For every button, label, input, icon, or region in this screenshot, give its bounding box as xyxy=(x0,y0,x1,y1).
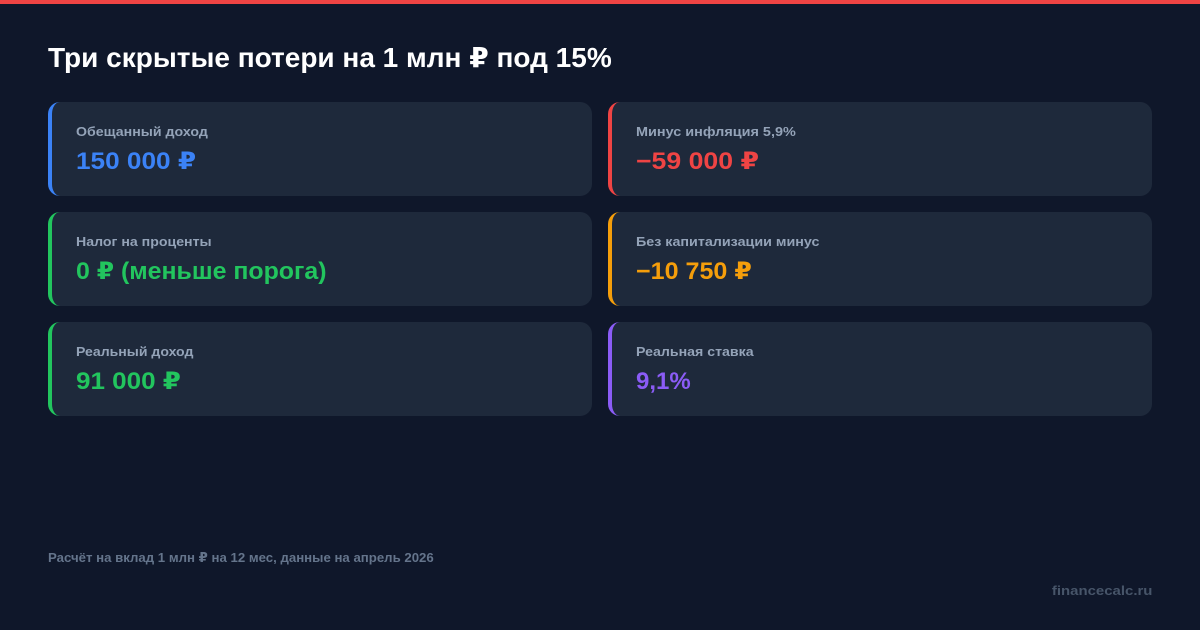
card: real rate xyxy=(608,322,1152,416)
card: tax xyxy=(48,212,592,306)
label: no capitalization: Без капитализации минус xyxy=(636,234,819,249)
card: promised income xyxy=(48,102,592,196)
value: inflation: −59 000 ₽ xyxy=(636,148,759,175)
label: tax: Налог на проценты xyxy=(76,234,212,249)
card: no capitalization xyxy=(608,212,1152,306)
card: real income xyxy=(48,322,592,416)
label: real rate: Реальная ставка xyxy=(636,344,754,359)
brand: financecalc.ru xyxy=(1051,583,1152,598)
footnote: Расчёт на вклад 1 млн ₽ на 12 мес, данные на апрель 2026 xyxy=(48,550,434,565)
label: real income: Реальный доход xyxy=(76,344,193,359)
value: promised income: 150 000 ₽ xyxy=(76,148,196,175)
value: real rate: 9,1% xyxy=(636,368,691,395)
value: tax: 0 ₽ (меньше порога) xyxy=(76,258,327,285)
label: promised income: Обещанный доход xyxy=(76,124,208,139)
value: no capitalization: −10 750 ₽ xyxy=(636,258,752,285)
title: Три скрытые потери на 1 млн ₽ под 15% xyxy=(48,42,612,73)
card: inflation xyxy=(608,102,1152,196)
label: inflation: Минус инфляция 5,9% xyxy=(636,124,796,139)
value: real income: 91 000 ₽ xyxy=(76,368,181,395)
top accent bar xyxy=(0,0,1200,4)
